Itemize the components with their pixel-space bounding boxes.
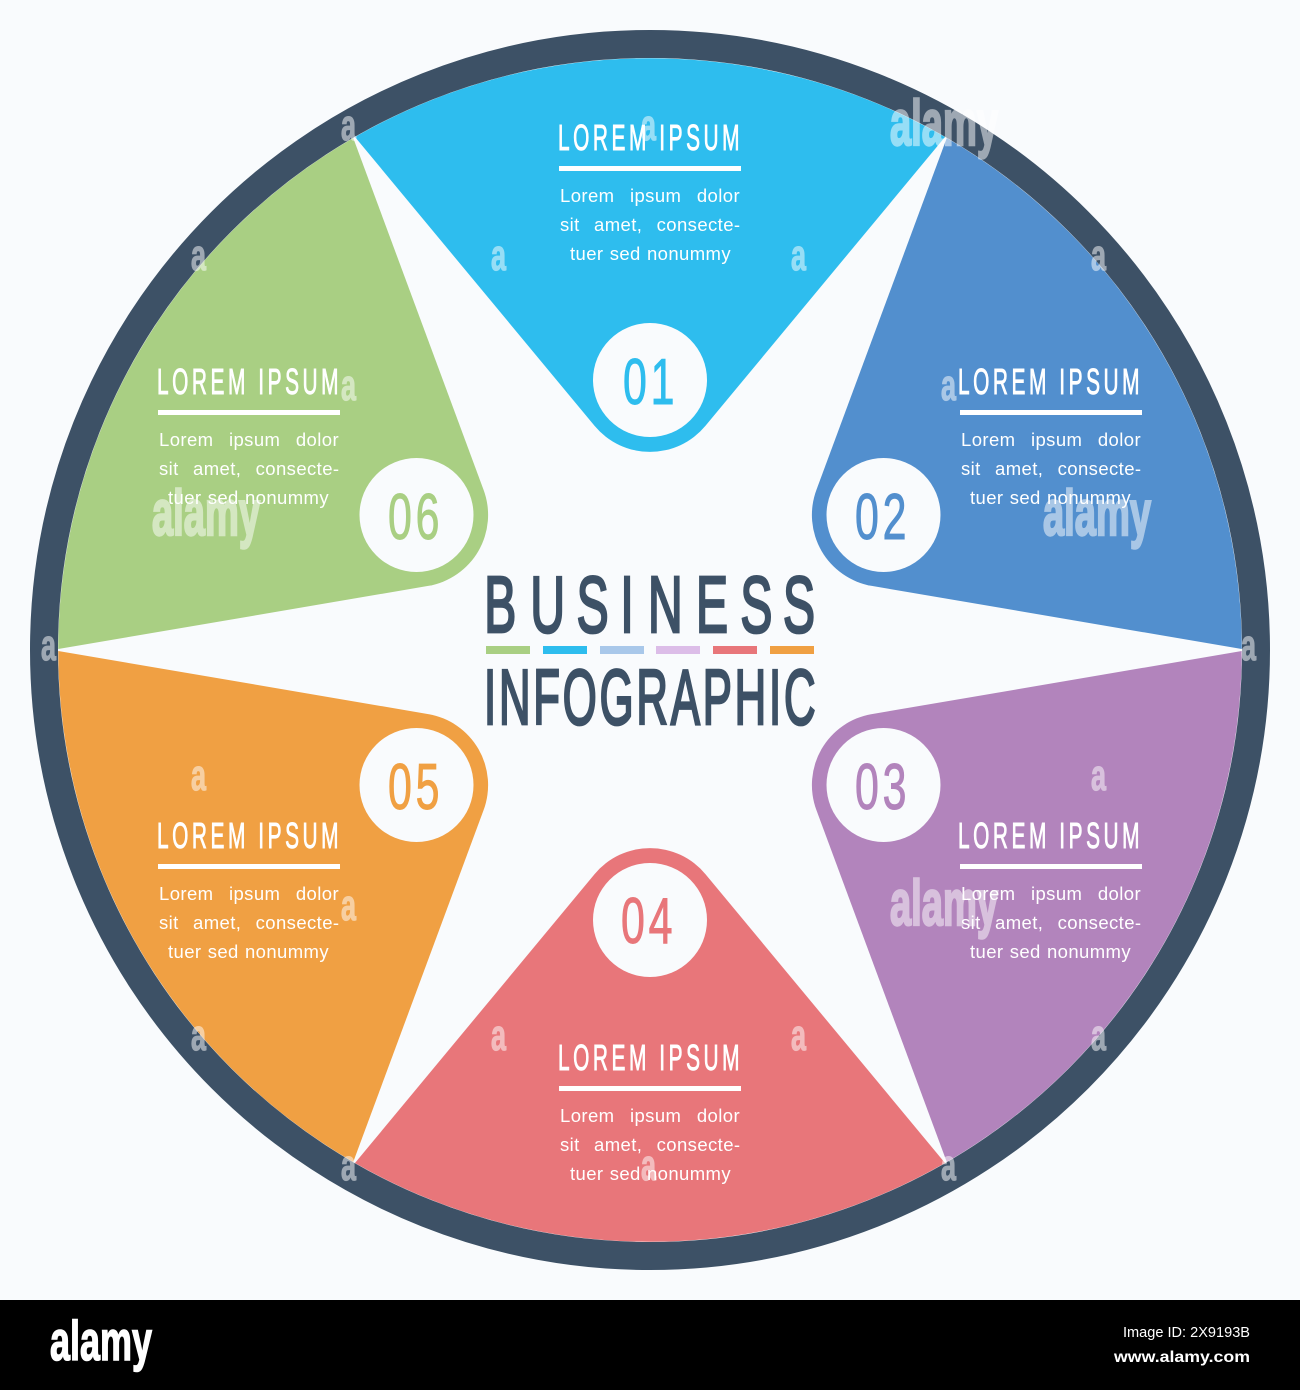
stock watermark overlay: a [791, 231, 806, 280]
stock watermark overlay: alamy [1043, 477, 1151, 549]
title word: BUSINESS: BUSINESS [484, 559, 815, 649]
segment shape 06 [0, 99, 626, 806]
stock watermark overlay: a [1091, 231, 1106, 280]
stock watermark overlay: a [41, 621, 56, 670]
rule 05 [158, 864, 340, 869]
number badge 03: 03 [855, 750, 906, 823]
number badge 02: 02 [855, 480, 906, 553]
number badge 04: 04 [621, 884, 672, 957]
body text 01: sit amet, consecte- [560, 214, 740, 235]
footer bar [0, 1300, 1300, 1390]
body text 01 [560, 185, 740, 264]
heading 02: LOREM IPSUM [958, 362, 1140, 403]
colour dash row [486, 646, 814, 654]
body text 03: sit amet, consecte- [961, 912, 1141, 933]
number badge 06 [360, 458, 474, 572]
stock watermark overlay: a [1091, 1011, 1106, 1060]
heading 04: LOREM IPSUM [558, 1038, 740, 1079]
central title [484, 559, 816, 741]
heading 06: LOREM IPSUM [157, 362, 339, 403]
panel 06: green segment [0, 99, 626, 806]
segment shape 03 [674, 494, 1300, 1201]
number badge 01: 01 [623, 345, 674, 418]
body text 02: Lorem ipsum dolor [961, 429, 1141, 450]
body text 01: tuer sed nonummy [570, 243, 731, 264]
stock watermark overlay: a [491, 231, 506, 280]
rule 06 [158, 410, 340, 415]
heading 05: LOREM IPSUM [157, 816, 339, 857]
stock watermark overlay: a [341, 881, 356, 930]
body text 06: sit amet, consecte- [159, 458, 339, 479]
panel 04: red segment [355, 848, 945, 1242]
stock watermark overlay [41, 87, 1256, 1190]
stock watermark overlay: a [191, 751, 206, 800]
body text 06: Lorem ipsum dolor [159, 429, 339, 450]
stock watermark overlay: alamy [890, 87, 998, 159]
stock watermark overlay: a [191, 1011, 206, 1060]
number badge 02 [826, 458, 940, 572]
body text 05: tuer sed nonummy [168, 941, 329, 962]
panel 02: steel blue segment [674, 99, 1300, 806]
body text 01: Lorem ipsum dolor [560, 185, 740, 206]
segment shape 01 [355, 58, 945, 452]
panel 03: purple segment [674, 494, 1300, 1201]
body text 03: tuer sed nonummy [970, 941, 1131, 962]
stock watermark overlay: a [941, 1141, 956, 1190]
body text 06 [159, 429, 339, 508]
number badge 01 [593, 323, 707, 437]
body text 05 [159, 883, 339, 962]
stock watermark overlay: a [641, 101, 656, 150]
body text 02 [961, 429, 1141, 508]
stock watermark overlay: a [341, 361, 356, 410]
stock watermark overlay: a [641, 1141, 656, 1190]
number badge 05 [360, 728, 474, 842]
footer logo: alamy [50, 1309, 152, 1372]
body text 03: Lorem ipsum dolor [961, 883, 1141, 904]
body text 04 [560, 1105, 740, 1184]
stock watermark overlay: a [491, 1011, 506, 1060]
stock watermark overlay: alamy [152, 477, 260, 549]
stock watermark overlay: a [341, 101, 356, 150]
rule 04 [559, 1086, 741, 1091]
segment shape 05 [0, 494, 626, 1201]
title word: INFOGRAPHIC: INFOGRAPHIC [484, 655, 816, 741]
body text 06: tuer sed nonummy [168, 487, 329, 508]
body text 03 [961, 883, 1141, 962]
stock watermark overlay: a [791, 1011, 806, 1060]
stock watermark overlay: a [341, 1141, 356, 1190]
body text 04: sit amet, consecte- [560, 1134, 740, 1155]
panel 01: blue segment [355, 58, 945, 452]
stock watermark overlay: a [941, 361, 956, 410]
segment shape 04 [355, 848, 945, 1242]
footer image id: Image ID: 2X9193B [1123, 1324, 1250, 1341]
body text 02: sit amet, consecte- [961, 458, 1141, 479]
body text 04: Lorem ipsum dolor [560, 1105, 740, 1126]
panel 05: orange segment [0, 494, 626, 1201]
body text 04: tuer sed nonummy [570, 1163, 731, 1184]
stock watermark overlay: alamy [890, 867, 998, 939]
body text 02: tuer sed nonummy [970, 487, 1131, 508]
number badge 03 [826, 728, 940, 842]
footer url: www.alamy.com [1113, 1349, 1250, 1366]
rule 03 [960, 864, 1142, 869]
stock watermark overlay: a [1241, 621, 1256, 670]
number badge 06: 06 [388, 480, 439, 553]
stock watermark overlay: a [1091, 751, 1106, 800]
rule 01 [559, 166, 741, 171]
stock watermark overlay: a [191, 231, 206, 280]
heading 01: LOREM IPSUM [558, 118, 740, 159]
segment shape 02 [674, 99, 1300, 806]
body text 05: sit amet, consecte- [159, 912, 339, 933]
number badge 04 [593, 863, 707, 977]
number badge 05: 05 [388, 750, 439, 823]
body text 05: Lorem ipsum dolor [159, 883, 339, 904]
rule 02 [960, 410, 1142, 415]
heading 03: LOREM IPSUM [958, 816, 1140, 857]
